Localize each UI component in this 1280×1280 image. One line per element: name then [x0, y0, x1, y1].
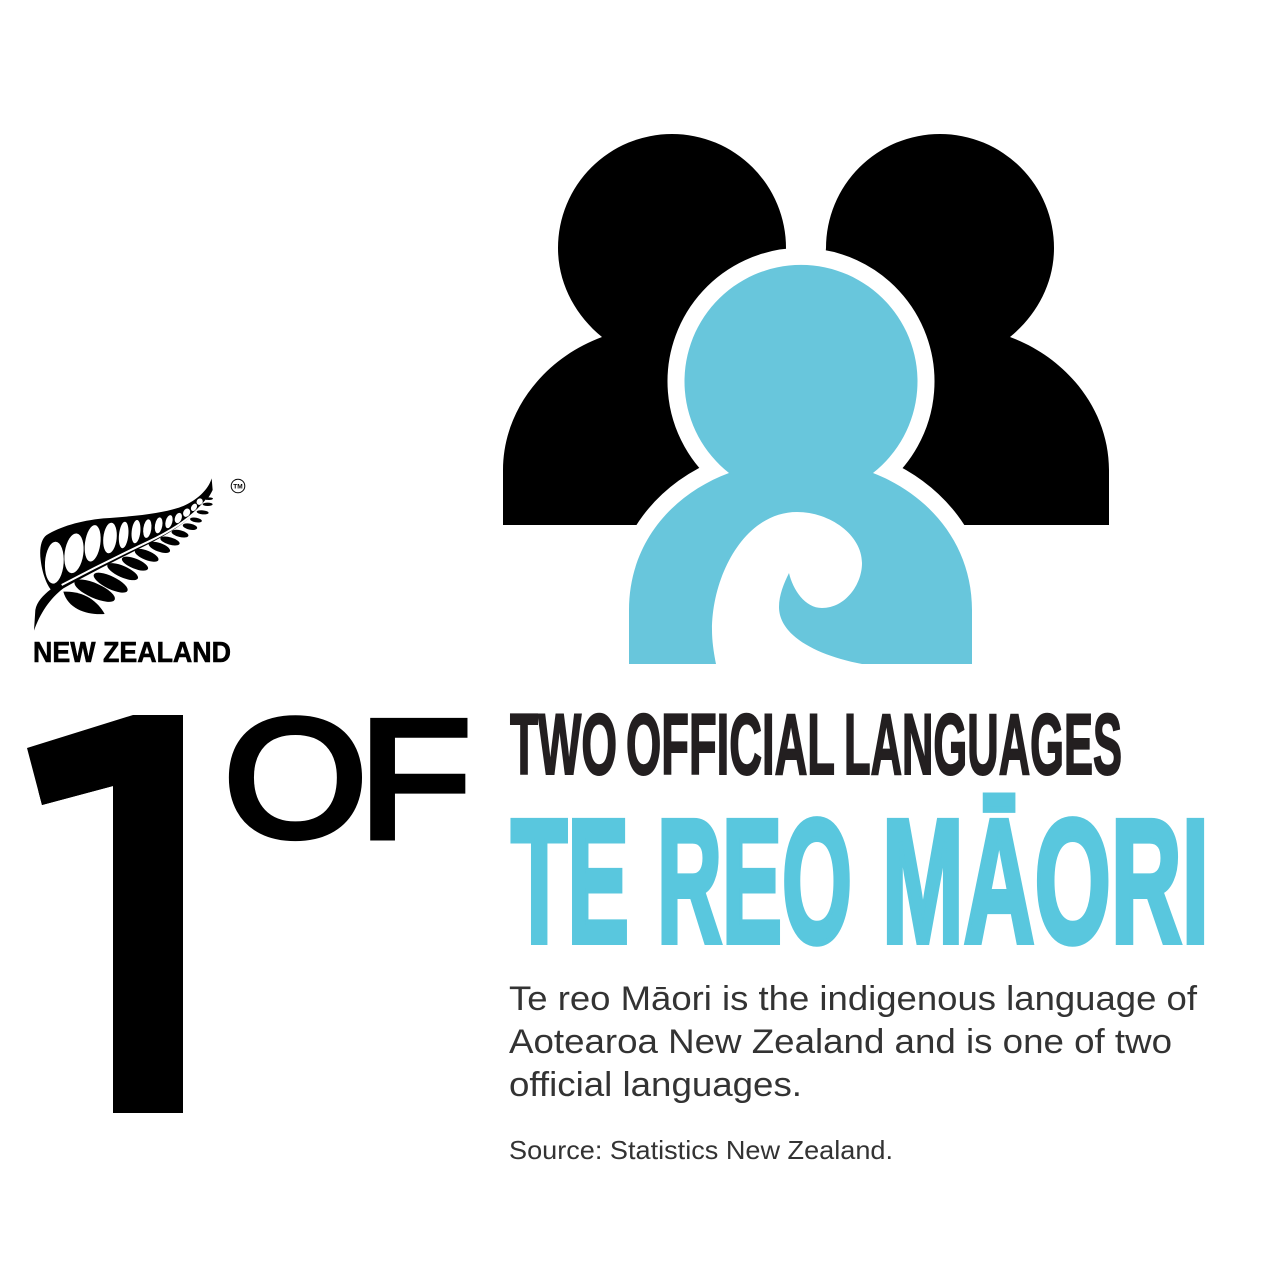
big number 1: 1	[0, 606, 311, 1232]
heading: two official languages: OFFICIAL	[626, 697, 835, 793]
trademark mark	[231, 479, 245, 493]
trademark mark: TM	[233, 484, 243, 490]
heading: two official languages: TWO	[510, 697, 617, 793]
icon: blue person with koru	[629, 265, 972, 664]
body text: Te reo Māori is the indigenous language of	[509, 980, 1198, 1018]
icon: three people with koru	[503, 134, 1109, 664]
heading: OF: F	[359, 685, 471, 873]
logo wordmark: NEW ZEALAND	[33, 637, 231, 669]
logo: New Zealand fern mark	[33, 478, 245, 669]
icon: left black person	[503, 134, 800, 525]
heading: OF	[224, 684, 471, 873]
source note: Source: Statistics New Zealand.	[509, 1135, 893, 1165]
icon: silver fern	[34, 478, 213, 631]
body text: Aotearoa New Zealand and is one of two	[509, 1023, 1172, 1061]
infographic	[27, 134, 1204, 1160]
icon: right black person	[800, 134, 1109, 525]
heading: OF: O	[224, 684, 367, 872]
heading: two official languages	[510, 697, 1122, 793]
body text: official languages.	[509, 1066, 802, 1104]
heading: te reo Māori: TE	[511, 784, 629, 980]
body text	[509, 980, 1198, 1104]
heading: te reo Māori	[511, 784, 1209, 980]
heading: te reo Māori: REO	[657, 784, 852, 980]
